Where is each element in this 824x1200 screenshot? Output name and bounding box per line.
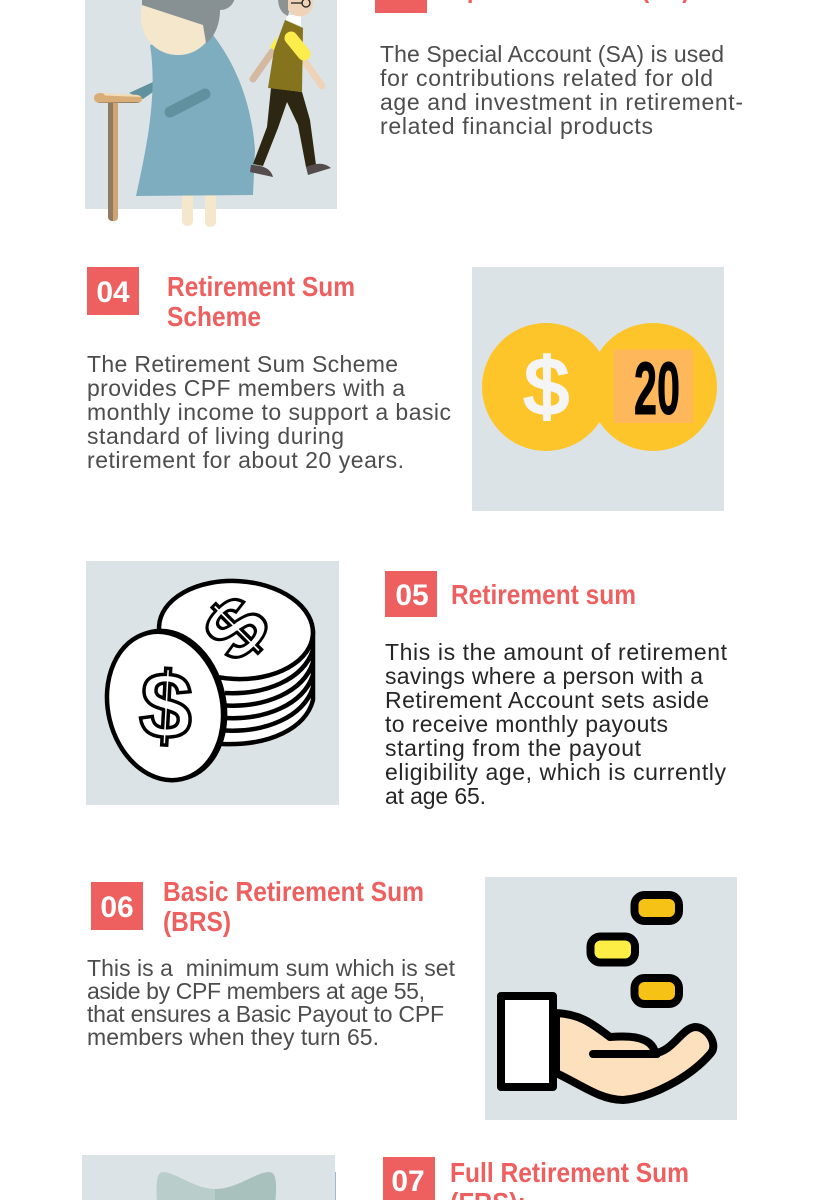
icon: woman's legs bbox=[182, 190, 216, 227]
icon: front coin bbox=[93, 620, 237, 792]
icon: woman's face bbox=[141, 5, 208, 55]
icon: dollar coin bbox=[482, 323, 610, 451]
text block: retirement sum scheme description: standard of living during bbox=[87, 423, 344, 449]
icon: woman's far arm bbox=[129, 82, 153, 99]
section 04: retirement sum scheme bbox=[87, 267, 724, 511]
heading: retirement sum scheme bbox=[167, 271, 355, 332]
text block: retirement sum description bbox=[385, 639, 728, 809]
heading: basic retirement sum bbox=[163, 876, 424, 937]
number badge 06: 06 bbox=[100, 891, 134, 924]
text block: retirement sum scheme description bbox=[87, 351, 451, 473]
heading: full retirement sum bbox=[450, 1157, 689, 1200]
icon: collar right half bbox=[215, 1172, 276, 1200]
icon: man's hair bbox=[278, 0, 292, 16]
icon: man's collar bbox=[286, 15, 301, 26]
icon: walking stick bbox=[94, 93, 142, 221]
section 06: basic retirement sum bbox=[87, 876, 737, 1120]
text block: retirement sum description: at age 65. bbox=[385, 783, 486, 809]
icon: man's far sleeve bbox=[270, 36, 277, 51]
heading: basic retirement sum: (BRS) bbox=[163, 906, 231, 937]
number badge 06 bbox=[91, 882, 143, 930]
icon: woman's dress bbox=[136, 35, 255, 196]
icon: man's shoes bbox=[250, 164, 331, 177]
text block: basic retirement sum description: This is a minimum sum which is set bbox=[87, 955, 456, 981]
icon: front coin rim bbox=[97, 619, 239, 791]
heading: retirement sum scheme: Scheme bbox=[167, 301, 261, 332]
text block: retirement sum description: starting from the payout bbox=[385, 735, 642, 761]
text block: retirement sum description: Retirement Account sets aside bbox=[385, 687, 709, 713]
icon: man's vest bbox=[268, 20, 303, 92]
icon: coin stack bbox=[157, 577, 315, 744]
panel: hand and coins illustration bbox=[485, 877, 737, 1120]
number badge 04 bbox=[87, 267, 139, 315]
heading: retirement sum: Retirement sum bbox=[451, 579, 636, 610]
panel: full retirement sum illustration bbox=[82, 1155, 336, 1200]
icon: 20 coin bbox=[589, 323, 717, 451]
section 05: retirement sum bbox=[86, 561, 728, 809]
text block: basic retirement sum description: that ensures a Basic Payout to CPF bbox=[87, 1001, 444, 1027]
number badge 07: 07 bbox=[391, 1165, 425, 1198]
icon: man's yellow sleeve bbox=[291, 38, 304, 54]
number badge 03 bbox=[375, 0, 427, 13]
number badge 04: 04 bbox=[96, 276, 130, 309]
heading: basic retirement sum: Basic Retirement Sum bbox=[163, 876, 424, 907]
text block: retirement sum scheme description: The Retirement Sum Scheme bbox=[87, 351, 398, 377]
text block: retirement sum description: This is the amount of retirement bbox=[385, 639, 728, 665]
icon: man's trousers bbox=[253, 88, 316, 167]
text block: special account description: related financial products bbox=[380, 113, 653, 139]
text block: special account description: age and investment in retirement- bbox=[380, 89, 743, 115]
text block: special account description bbox=[380, 41, 743, 139]
text block: special account description: for contributions related for old bbox=[380, 65, 713, 91]
icon: woman's near arm bbox=[170, 94, 205, 112]
icon: man's glasses bbox=[291, 0, 310, 7]
text block: retirement sum scheme description: provides CPF members with a bbox=[87, 375, 405, 401]
icon: falling coins bbox=[590, 895, 679, 1004]
text block: retirement sum scheme description: monthly income to support a basic bbox=[87, 399, 451, 425]
text block: basic retirement sum description: aside by CPF members at age 55, bbox=[87, 978, 425, 1004]
text block: basic retirement sum description bbox=[87, 955, 456, 1050]
number badge 05 bbox=[385, 571, 437, 617]
heading: full retirement sum: Full Retirement Sum bbox=[450, 1157, 689, 1188]
icon: man's near arm bbox=[301, 56, 322, 86]
icon: man's far arm bbox=[253, 52, 272, 79]
heading: retirement sum scheme: Retirement Sum bbox=[167, 271, 355, 302]
icon: open hand bbox=[556, 1013, 713, 1100]
number badge 05: 05 bbox=[395, 579, 429, 612]
icon: shirt cuff bbox=[501, 996, 553, 1087]
text block: special account description: The Special Account (SA) is used bbox=[380, 41, 724, 67]
section 03: special account bbox=[85, 0, 743, 227]
text block: retirement sum scheme description: retirement for about 20 years. bbox=[87, 447, 404, 473]
number badge 07 bbox=[383, 1157, 435, 1200]
text block: basic retirement sum description: members when they turn 65. bbox=[87, 1024, 379, 1050]
text block: retirement sum description: savings where a person with a bbox=[385, 663, 703, 689]
panel: coins illustration bbox=[472, 267, 724, 511]
icon: 20 coin: 20 bbox=[634, 347, 680, 430]
panel: elderly couple illustration bbox=[85, 0, 337, 227]
icon: man's head bbox=[288, 0, 313, 16]
icon: front coin dollar sign: $ bbox=[137, 652, 195, 759]
text block: retirement sum description: eligibility age, which is currently bbox=[385, 759, 726, 785]
icon: top coin dollar sign: $ bbox=[186, 578, 287, 679]
icon: woman's hair bbox=[142, 0, 235, 43]
icon: collar left half bbox=[157, 1172, 215, 1200]
icon: dollar coin: $ bbox=[524, 342, 569, 431]
section 07: full retirement sum bbox=[82, 1155, 689, 1200]
text block: retirement sum description: to receive monthly payouts bbox=[385, 711, 668, 737]
panel: coin stack illustration bbox=[86, 561, 339, 805]
